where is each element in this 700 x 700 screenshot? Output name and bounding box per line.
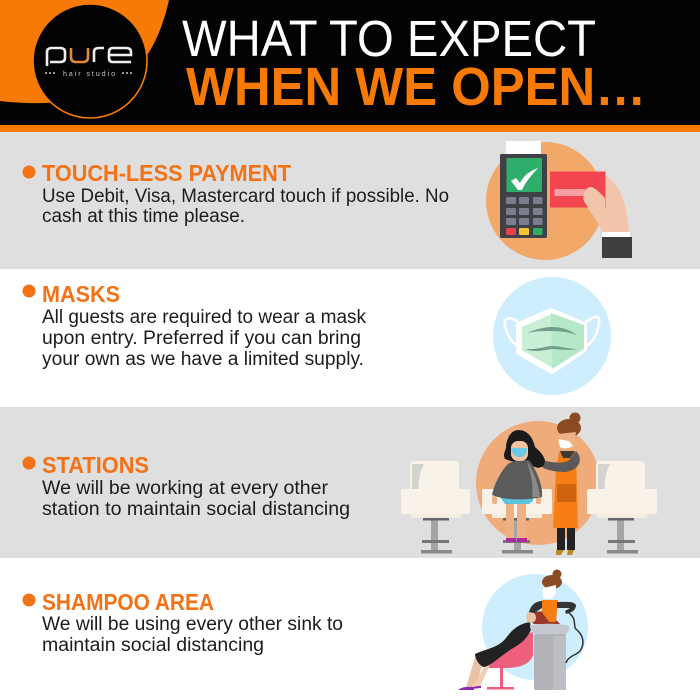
logo [33,4,147,118]
right chair [587,461,657,554]
title: WHEN WE OPEN… [186,57,646,117]
panel: masks: All guests are required to wear a mask [42,307,366,328]
left chair [401,461,470,554]
panel: stations: We will be working at every other [42,478,329,499]
title: WHAT TO EXPECT [182,10,596,67]
logo: hair studio [63,71,115,78]
icon: shampoo sink illustration [458,570,588,690]
panel: masks: upon entry. Preferred if you can bring [42,328,361,349]
icon: card payment terminal [486,141,632,260]
panel: touch-less payment: TOUCH-LESS PAYMENT [42,160,292,186]
panel: masks: your own as we have a limited supply. [42,349,364,370]
header band [0,0,700,132]
panel: stations: STATIONS [42,452,149,478]
client [492,430,545,542]
stylist [543,412,581,555]
title [182,10,646,117]
panel: masks: MASKS [42,281,120,307]
middle chair [482,489,552,554]
panel: stations [0,407,700,558]
panel: masks [22,277,611,395]
panel: shampoo area: SHAMPOO AREA [42,589,214,615]
panel: touch-less payment: Use Debit, Visa, Mastercard touch if possible. No [42,186,449,207]
panel: shampoo area: maintain social distancing [42,635,264,656]
panel: touch-less payment [0,132,700,269]
panel: shampoo area [22,570,588,690]
icon: face mask [493,277,611,395]
panel: touch-less payment: cash at this time please. [42,206,245,227]
panel: stations: station to maintain social distancing [42,499,350,520]
panel: shampoo area: We will be using every other sink to [42,614,343,635]
icon: salon stations illustration [401,412,657,555]
